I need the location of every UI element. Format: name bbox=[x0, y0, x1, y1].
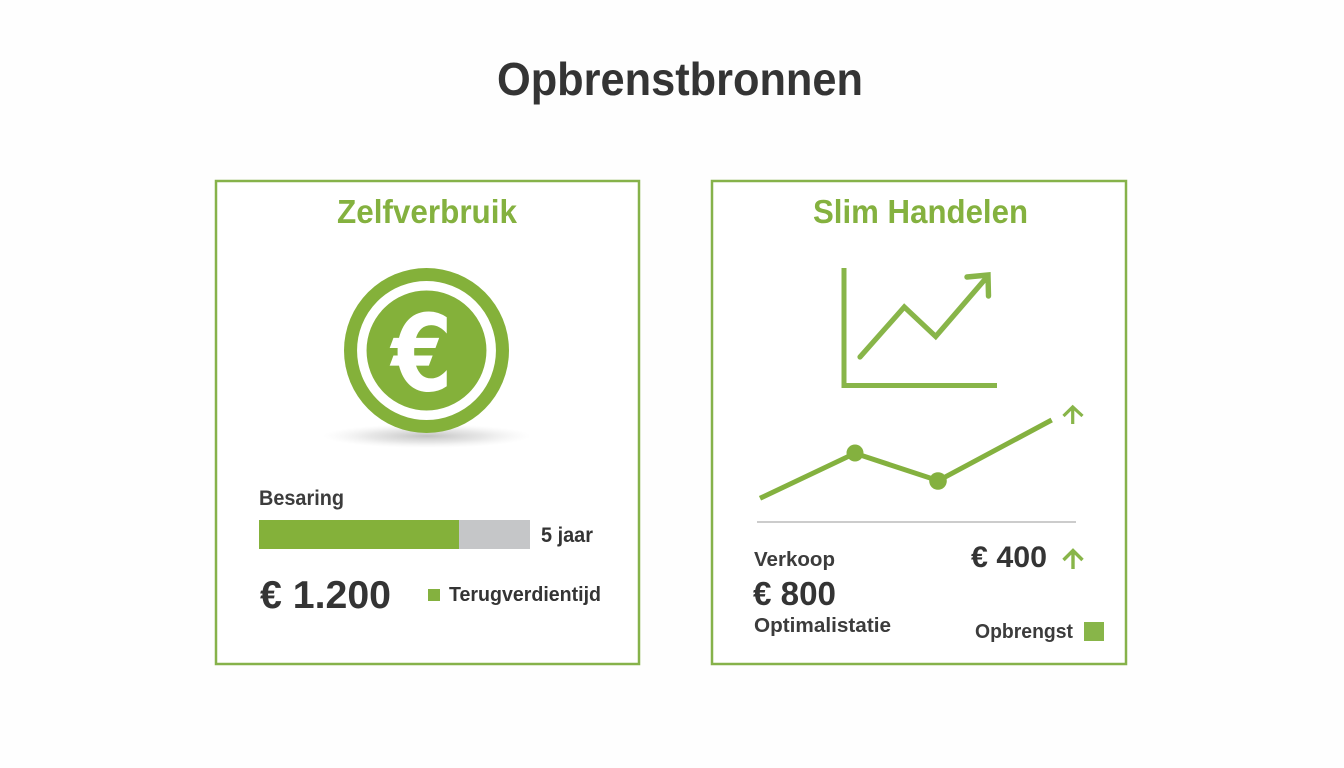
label: Besaring: Besaring bbox=[259, 487, 344, 510]
heading: Slim Handelen: Slim Handelen bbox=[813, 193, 1028, 230]
panel: Zelfverbruik bbox=[216, 181, 639, 664]
panel: Slim Handelen bbox=[712, 181, 1126, 664]
value: € 400: € 400 bbox=[971, 541, 1047, 574]
icon: euro coin bbox=[323, 268, 531, 448]
panel border bbox=[216, 181, 639, 664]
legend: Opbrengst: Opbrengst bbox=[975, 621, 1073, 643]
panel border bbox=[712, 181, 1126, 664]
divider line bbox=[757, 521, 1076, 523]
label: Verkoop: Verkoop bbox=[754, 549, 835, 571]
value: € 800: € 800 bbox=[753, 575, 836, 612]
icon: up arrow bbox=[1064, 550, 1082, 569]
heading: Zelfverbruik: Zelfverbruik bbox=[337, 193, 518, 230]
icon: small up arrow bbox=[1064, 407, 1082, 424]
icon: rising chart bbox=[844, 268, 997, 386]
legend: Terugverdientijd: Terugverdientijd bbox=[449, 584, 601, 606]
label: 5 jaar: 5 jaar bbox=[541, 524, 593, 547]
line chart bbox=[760, 420, 1052, 498]
label: Optimalistatie: Optimalistatie bbox=[754, 615, 891, 637]
title: Opbrenstbronnen bbox=[497, 53, 863, 105]
progress bar bbox=[259, 520, 530, 549]
value: € 1.200: € 1.200 bbox=[260, 574, 391, 617]
icon: euro coin: € bbox=[390, 293, 453, 416]
